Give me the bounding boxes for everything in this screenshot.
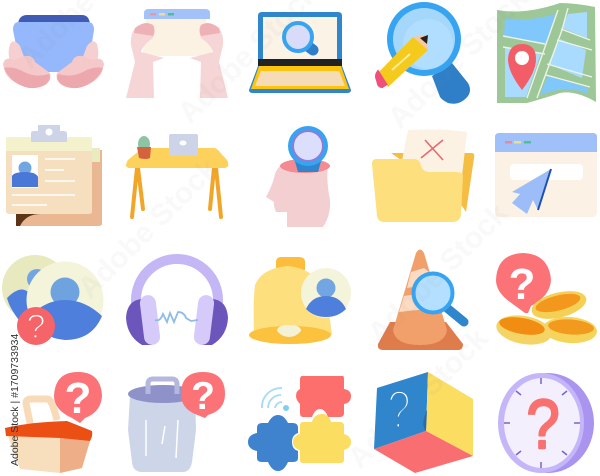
icon: laptop with magnifier	[249, 12, 351, 93]
icon: ID card on clipboard	[6, 125, 102, 226]
icon: hands holding tablet	[3, 15, 104, 88]
icon: map with location pin	[497, 3, 596, 103]
icon: users with question	[2, 255, 104, 346]
icon: traffic cone with magnifier	[378, 250, 464, 350]
watermark: faint diagonal text: Adobe Stock	[72, 152, 225, 305]
icon: trash can with question bubble: ?	[191, 375, 215, 418]
icon: magnifier with pencil	[376, 2, 470, 104]
icon: bell with person	[249, 257, 351, 344]
icon: coins with question bubble	[494, 253, 598, 349]
icon: browser window with cursor	[495, 133, 597, 217]
icon: puzzle pieces with wifi	[248, 376, 351, 471]
icon: desk with laptop and plant	[126, 134, 228, 217]
icon: basket with question bubble	[5, 372, 102, 473]
icon: clock with question mark: ?	[526, 384, 560, 463]
icon: basket with question bubble: ?	[65, 374, 91, 423]
watermark: stock id: Adobe Stock | #1709733934	[9, 334, 21, 466]
icon: cube with question mark: ?	[387, 380, 411, 440]
icon: clock with question mark	[498, 373, 594, 473]
icon: folder with rejected paper	[372, 129, 474, 222]
icon: users with question: ?	[27, 308, 45, 346]
icon: headphones with sound wave	[126, 259, 228, 346]
watermark: faint diagonal text: Adobe Stock	[342, 322, 495, 475]
watermark: faint diagonal text: Adobe Stock	[362, 197, 515, 350]
icon: head with magnifier	[266, 126, 330, 227]
icon: trash can with question bubble	[128, 372, 225, 472]
icon: hands holding browser window	[126, 9, 228, 98]
icon: coins with question bubble: ?	[509, 260, 535, 309]
icon: cube with question mark	[374, 372, 473, 473]
